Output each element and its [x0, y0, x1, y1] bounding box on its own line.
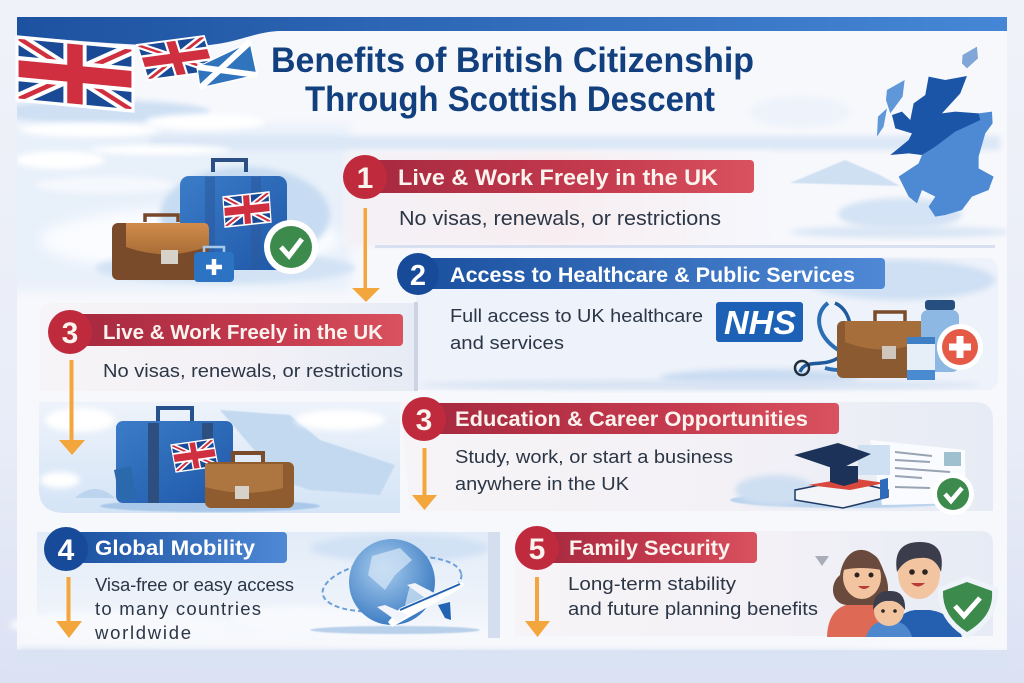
text: mobility description: Visa-free or easy access: [95, 574, 294, 595]
heading bar 3 left: Live & Work Freely in the UK: [103, 322, 384, 344]
heading bar 4: [44, 527, 287, 571]
icon: small Union Jack flag: [137, 36, 215, 80]
illustration: document: [858, 440, 966, 505]
heading bar 4: 4: [58, 534, 75, 567]
panel: 4 Global Mobility: [10, 527, 500, 643]
heading bar 1: Live & Work Freely in the UK: [398, 165, 718, 190]
icon: green check badge: [264, 220, 318, 274]
heading bar 2: [397, 253, 885, 295]
title: Through Scottish Descent: [305, 80, 715, 119]
text: education description: Study, work, or start a business: [455, 446, 733, 467]
panel: luggage scene: [39, 360, 400, 513]
heading bar 5: [515, 526, 757, 570]
illustration: stethoscope, briefcase and medicine: [795, 300, 959, 381]
illustration: brown briefcase: [205, 453, 294, 508]
icon: small marker triangle: [815, 556, 829, 566]
text: education description: anywhere in the UK: [455, 473, 630, 494]
text: point 1 description: No visas, renewals, or restrictions: [399, 208, 721, 230]
heading bar 5: 5: [529, 533, 545, 566]
heading bar 3 right: [402, 397, 839, 441]
illustration: family: [827, 542, 962, 637]
heading bar 3 left: [48, 310, 403, 354]
illustration: graduation cap on books: [794, 443, 888, 508]
icon: green check badge: [932, 473, 974, 515]
text: point 3 description: No visas, renewals, or restrictions: [103, 360, 403, 381]
panel: 3 Live and Work Freely repeat: [40, 302, 418, 391]
heading bar 3 right: 3: [416, 404, 432, 437]
heading bar 4: Global Mobility: [95, 537, 255, 560]
top colour bar with swoosh: [17, 17, 1007, 46]
text: family description: Long-term stability: [568, 573, 737, 594]
text: mobility description: to many countries: [95, 598, 261, 619]
arrow 1: [352, 208, 380, 302]
heading bar 2: Access to Healthcare & Public Services: [450, 264, 855, 287]
text: mobility description: worldwide: [94, 622, 191, 643]
heading bar 1: 1: [357, 162, 373, 195]
text: mobility description: [94, 574, 294, 643]
illustration: globe and plane: [319, 539, 465, 627]
panel: 5 Family Security: [515, 526, 998, 638]
arrow: education: [412, 448, 437, 510]
heading bar 1: [343, 155, 754, 199]
panel: 1 Live and Work Freely: [95, 155, 754, 302]
arrow: family: [525, 577, 550, 637]
illustration: suitcase and briefcase: [95, 160, 355, 284]
panel: 2 Healthcare: [397, 253, 998, 390]
text: point 2 description: Full access to UK healthcare: [450, 305, 703, 326]
bottom cloud band: [17, 648, 1007, 669]
icon: Scottish saltire flag: [197, 42, 257, 88]
heading bar 3 right: Education & Career Opportunities: [455, 408, 808, 431]
icon: security shield: [938, 576, 998, 638]
icon: NHS logo: NHS: [724, 304, 796, 341]
icon: Scotland map: [877, 47, 994, 217]
text: education description: [455, 446, 733, 494]
heading bar 3 left: 3: [62, 317, 78, 350]
heading bar 2: 2: [410, 260, 426, 292]
title: Benefits of British Citizenship: [271, 41, 754, 80]
text: point 2 description: [450, 305, 703, 353]
text: family description: and future planning benefits: [568, 598, 818, 619]
panel: 3 Education: [400, 397, 993, 515]
icon: medical cross badge: [937, 324, 983, 370]
icon: large Union Jack flag: [17, 37, 133, 111]
text: family description: [568, 573, 818, 619]
arrow: mobility: [56, 577, 82, 638]
heading bar 5: Family Security: [569, 537, 730, 560]
illustration: blue suitcase with flag: [114, 408, 233, 503]
arrow: left 3: [59, 360, 85, 455]
sky band behind header: [0, 96, 1010, 290]
text: point 2 description: and services: [450, 332, 564, 353]
title: [271, 41, 754, 119]
